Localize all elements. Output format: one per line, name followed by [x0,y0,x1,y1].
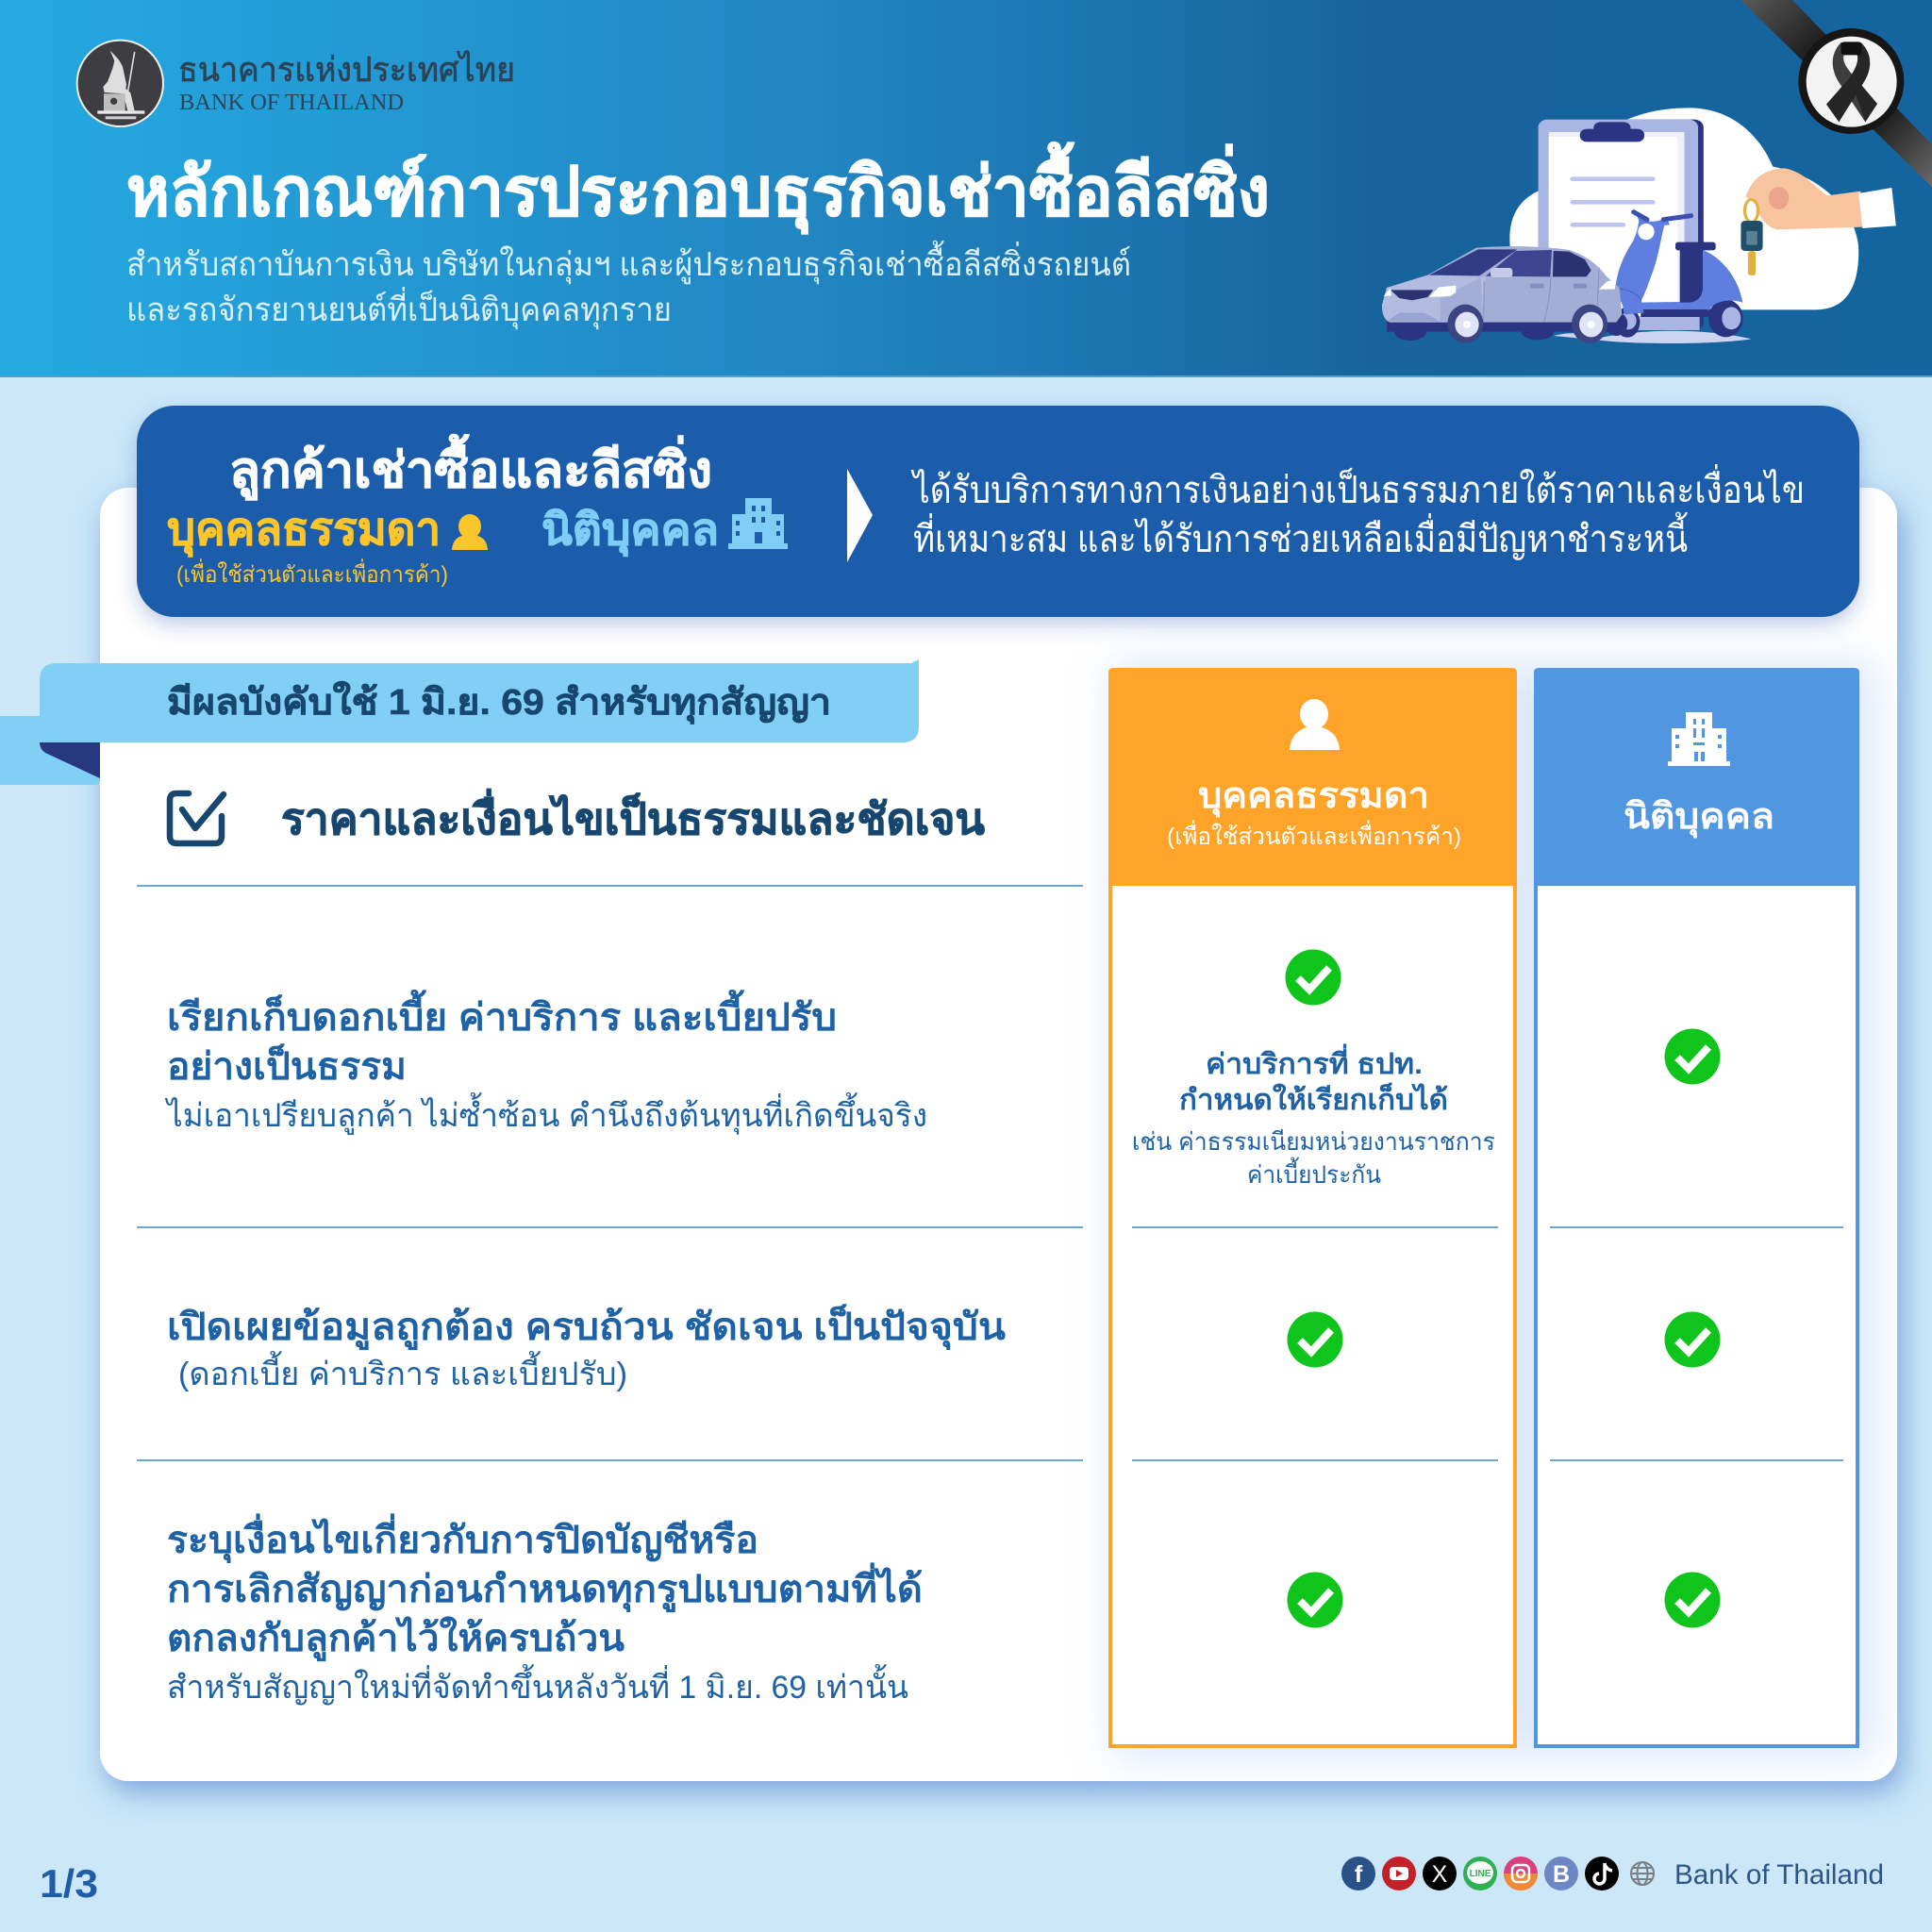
logo: Bank of Thailand seal [77,41,163,126]
arrow [847,469,873,562]
subtitle line 1: สำหรับสถาบันการเงิน บริษัทในกลุ่มฯ และผู้ประกอบธุรกิจเช่าซื้อลีสซิ่งรถยนต์ [126,240,1131,284]
icon: X: X [1432,1861,1448,1888]
row 3 heading line 2: การเลิกสัญญาก่อนกำหนดทุกรูปแบบตามที่ได้ [167,1562,923,1613]
panel: customers [137,406,1859,617]
rule: row 1 divider [137,1226,1083,1228]
column glow [1113,660,1877,1759]
check: row 1 individuals [1285,949,1341,1006]
rule: column row 1 [1550,1226,1843,1228]
check: row 3 individuals [1287,1572,1343,1628]
rule: column row 2 [1132,1459,1498,1461]
ribbon: effective date [0,659,919,785]
column: individuals [1108,668,1517,1746]
row 3 heading line 3: ตกลงกับลูกค้าไว้ให้ครบถ้วน [167,1616,625,1661]
check: row 1 juristic [1664,1028,1721,1085]
hand with key [1740,168,1896,275]
icon: facebook: f [1355,1861,1363,1888]
icon: building white [1668,712,1730,766]
row 1 text [164,990,927,1135]
icon: website globe [1631,1862,1654,1885]
benefit text line 2: ที่เหมาะสม และได้รับการช่วยเหลือเมื่อมีปัญหาชำระหนี้ [913,511,1688,560]
row 2 note: (ดอกเบี้ย ค่าบริการ และเบี้ยปรับ) [178,1351,627,1392]
title: หลักเกณฑ์การประกอบธุรกิจเช่าซื้อลีสซิ่ง [126,142,1270,235]
check: row 2 individuals [1287,1311,1343,1368]
icon: X [1423,1857,1457,1890]
mourning sash and black ribbon badge [1740,0,1932,187]
service fee note line 2: ค่าเบี้ยประกัน [1247,1157,1381,1189]
rule: column row 2 [1550,1459,1843,1461]
service fee heading line 1: ค่าบริการที่ ธปท. [1206,1043,1423,1080]
label: individuals: บุคคลธรรมดา [167,505,441,558]
row 1 heading line 1: เรียกเก็บดอกเบี้ย ค่าบริการ และเบี้ยปรับ [167,990,837,1039]
logo wordmark Thai: ธนาคารแห่งประเทศไทย [178,50,515,89]
illustration: contract, car, scooter, key [1382,108,1896,343]
icon: blockdit: B [1553,1861,1570,1888]
row 1 note: ไม่เอาเปรียบลูกค้า ไม่ซ้ำซ้อน คำนึงถึงต้นทุนที่เกิดขึ้นจริง [164,1092,927,1135]
check: row 2 juristic [1664,1311,1721,1368]
row 3 heading line 1: ระบุเงื่อนไขเกี่ยวกับการปิดบัญชีหรือ [167,1513,758,1564]
row 3 note: สำหรับสัญญาใหม่ที่จัดทำขึ้นหลังวันที่ 1 มิ.ย. 69 เท่านั้น [167,1664,908,1706]
row 2 text [167,1303,1006,1392]
rule: column row 1 [1132,1226,1498,1228]
service fee note line 1: เช่น ค่าธรรมเนียมหน่วยงานราชการ [1132,1127,1495,1156]
column note: (เพื่อใช้ส่วนตัวและเพื่อการค้า) [1167,820,1461,850]
main white card [100,488,1897,1781]
car [1382,246,1627,343]
icon: person white [1290,699,1340,750]
panel heading: ลูกค้าเช่าซื้อและลีสซิ่ง [229,434,712,501]
service fee heading line 2: กำหนดให้เรียกเก็บได้ [1179,1082,1448,1116]
footer brand: Bank of Thailand [1674,1859,1884,1890]
rule: row 2 divider [137,1459,1083,1461]
icon: person yellow [452,514,488,550]
icon: instagram [1504,1857,1538,1890]
icon: facebook [1341,1857,1375,1890]
section heading: ราคาและเงื่อนไขเป็นธรรมและชัดเจน [281,789,986,843]
social icons [1341,1857,1654,1890]
row 1 heading line 2: อย่างเป็นธรรม [167,1042,407,1088]
benefit text line 1: ได้รับบริการทางการเงินอย่างเป็นธรรมภายใต้ราคาและเงื่อนไข [910,464,1805,511]
ribbon text: มีผลบังคับใช้ 1 มิ.ย. 69 สำหรับทุกสัญญา [167,681,831,724]
check: row 3 juristic [1664,1572,1721,1628]
column heading: บุคคลธรรมดา [1198,776,1429,818]
icon: blockdit [1544,1857,1578,1890]
rule: header divider [137,885,1083,887]
icon: building light blue [728,498,788,549]
clipboard [1539,120,1704,330]
label: juristic persons: นิติบุคคล [541,505,719,557]
subtitle line 2: และรถจักรยานยนต์ที่เป็นนิติบุคคลทุกราย [126,287,672,329]
icon: tiktok [1585,1857,1619,1890]
row 3 text [167,1513,923,1706]
header banner [0,0,1932,377]
row 2 heading: เปิดเผยข้อมูลถูกต้อง ครบถ้วน ชัดเจน เป็นปัจจุบัน [167,1303,1006,1351]
page number: 1/3 [40,1861,98,1906]
note: purpose: (เพื่อใช้ส่วนตัวและเพื่อการค้า) [176,558,448,588]
icon: checkbox [170,793,224,843]
column heading: นิติบุคคล [1624,797,1774,839]
icon: LINE [1463,1857,1497,1890]
icon: LINE: LINE [1470,1869,1491,1879]
column: juristic persons [1534,668,1859,1746]
scooter [1554,212,1752,343]
icon: youtube [1382,1857,1416,1890]
logo wordmark English: BANK OF THAILAND [179,91,404,115]
